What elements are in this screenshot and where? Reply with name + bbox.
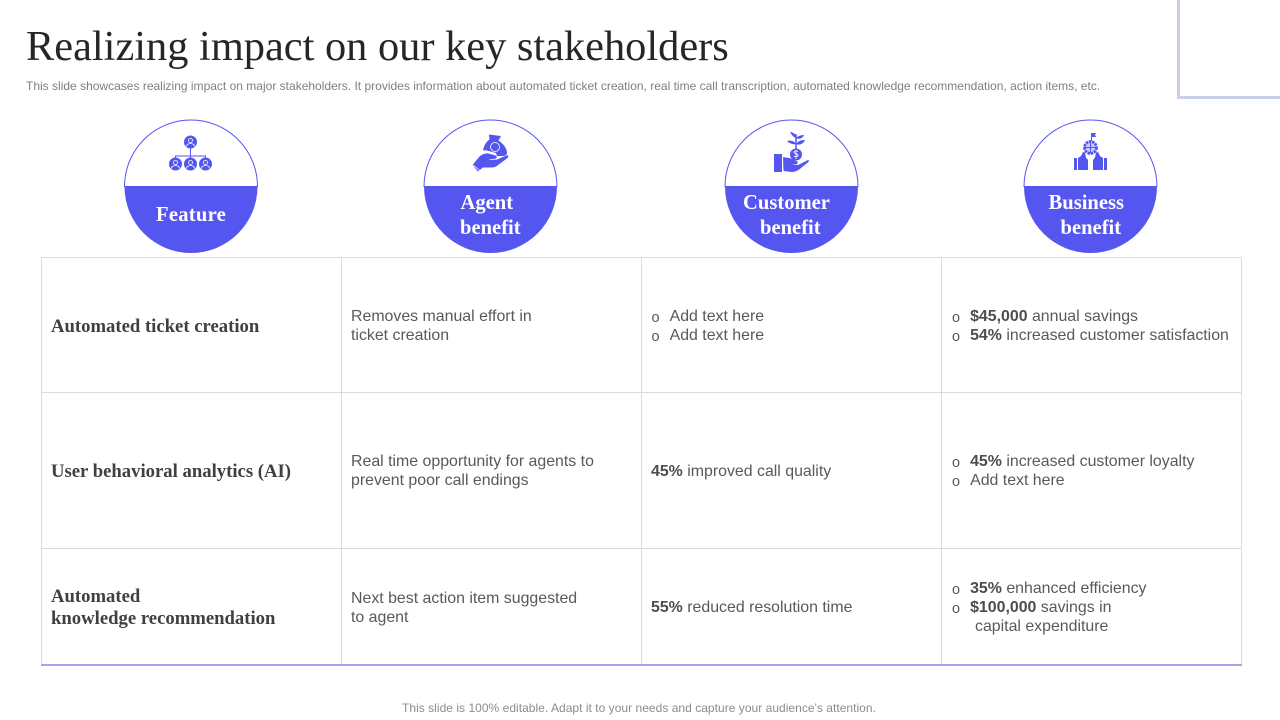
title: Realizing impact on our key stakeholders [26, 23, 729, 70]
row 1: business benefit: o [952, 329, 960, 345]
corner decoration [1177, 0, 1280, 99]
row 1: business benefit: $45,000 annual savings 54% increased customer satisfaction [970, 308, 1229, 344]
icon: organisation hierarchy [169, 136, 212, 170]
row 2: agent benefit: Real time opportunity for agents to prevent poor call endings [351, 453, 594, 489]
row 3: agent benefit: Next best action item suggested to agent [351, 590, 577, 626]
row 1: business benefit: o [952, 310, 960, 326]
row 1: feature: Automated ticket creation [51, 316, 259, 337]
header label: Business benefit: Business benefit [1048, 192, 1124, 238]
row 2: business benefit: o [952, 474, 960, 490]
header label: Feature: Feature [156, 204, 226, 226]
circle: feature [124, 120, 258, 253]
row 1: customer benefit: o [652, 329, 660, 345]
row 2: business benefit: o [952, 455, 960, 471]
row 3: business benefit: o [952, 582, 960, 598]
footer note: This slide is 100% editable. Adapt it to your needs and capture your audience's attention. [402, 701, 876, 715]
row 1: customer benefit: o [652, 310, 660, 326]
row 3: customer benefit: 55% reduced resolution time [651, 599, 852, 616]
row 3: feature: Automated knowledge recommendation [51, 586, 275, 629]
row 2: business benefit: 45% increased customer loyalty Add text here [970, 453, 1194, 489]
row 2: customer benefit: 45% improved call quality [651, 463, 831, 480]
row 3: business benefit: o [952, 601, 960, 617]
icon: thumbs up with globe [1074, 133, 1107, 170]
circle: agent benefit [424, 120, 557, 253]
icon: hand with growing coin plant [774, 132, 809, 172]
header label: Customer benefit: Customer benefit [743, 192, 830, 238]
row 1: customer benefit: Add text here Add text here [670, 308, 764, 344]
row 2: feature: User behavioral analytics (AI) [51, 461, 291, 482]
circle: business benefit [1024, 120, 1157, 253]
subtitle: This slide showcases realizing impact on major stakeholders. It provides information about automated ticket creation, real time call transcription, automated knowledge recommendation, action items, etc. [26, 79, 1100, 93]
row 1: agent benefit: Removes manual effort in ticket creation [351, 308, 532, 344]
header circles with icons [124, 120, 1158, 253]
circle: customer benefit [725, 120, 858, 253]
row 3: business benefit: 35% enhanced efficiency $100,000 savings in capital expenditure [970, 580, 1146, 635]
icon: hand holding money bag [472, 134, 508, 172]
header label: Agent benefit: Agent benefit [460, 192, 521, 238]
